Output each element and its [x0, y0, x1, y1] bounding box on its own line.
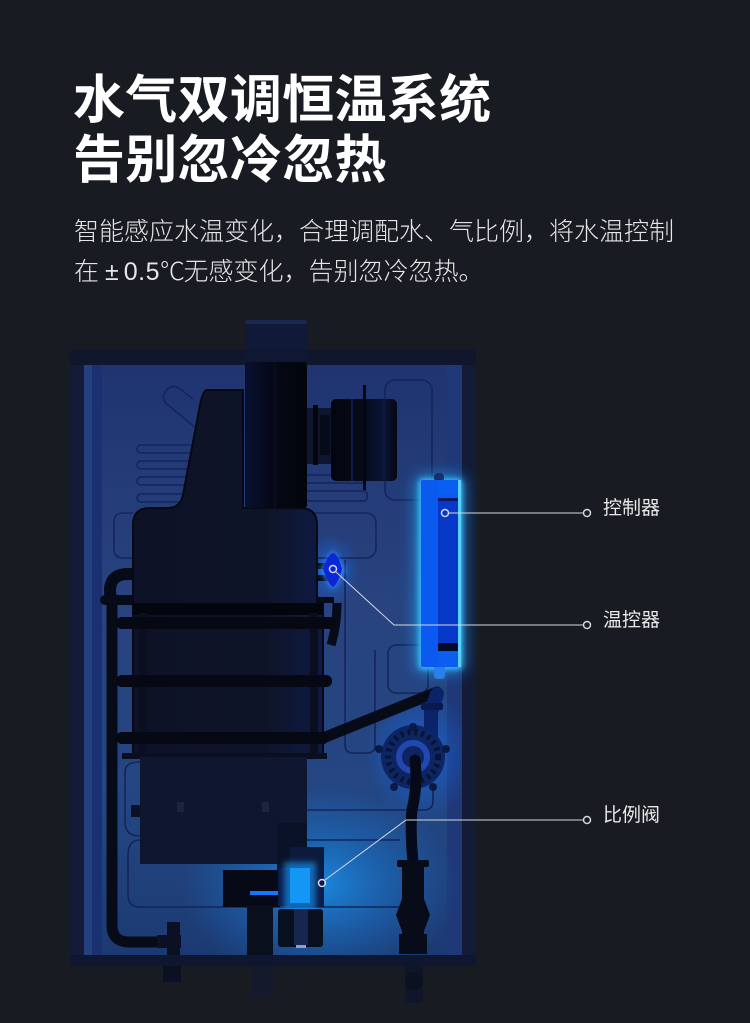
pump and pipes	[375, 694, 450, 862]
description text: 智能感应水温变化，合理调配水、气比例，将水温控制	[74, 218, 674, 246]
thermostat	[320, 550, 346, 590]
label: proportional valve: 比例阀	[603, 805, 660, 826]
coil pipes	[105, 566, 437, 942]
title: 告别忽冷忽热	[73, 132, 387, 190]
leader line: thermostat	[330, 566, 590, 628]
gas valve	[223, 823, 324, 998]
cabinet frame	[70, 350, 476, 985]
title: 水气双调恒温系统	[73, 72, 491, 130]
label: controller: 控制器	[603, 498, 660, 519]
panel embossed stamping	[114, 380, 433, 907]
motor	[307, 385, 397, 490]
title	[73, 72, 491, 190]
blower	[245, 362, 307, 508]
leader line: controller	[442, 510, 590, 516]
leader line: proportional valve	[318, 816, 590, 886]
gas control box	[131, 757, 307, 864]
flue collar	[243, 320, 309, 362]
heat exchanger	[122, 390, 330, 759]
lower water fitting	[396, 860, 430, 1003]
left drain connector	[157, 922, 181, 982]
controller glowing module	[416, 473, 464, 679]
description text	[74, 218, 674, 286]
water heater diagram	[70, 320, 592, 1003]
label: thermostat: 温控器	[603, 610, 660, 631]
description text: 在±0.5℃无感变化，告别忽冷忽热。	[74, 258, 484, 286]
